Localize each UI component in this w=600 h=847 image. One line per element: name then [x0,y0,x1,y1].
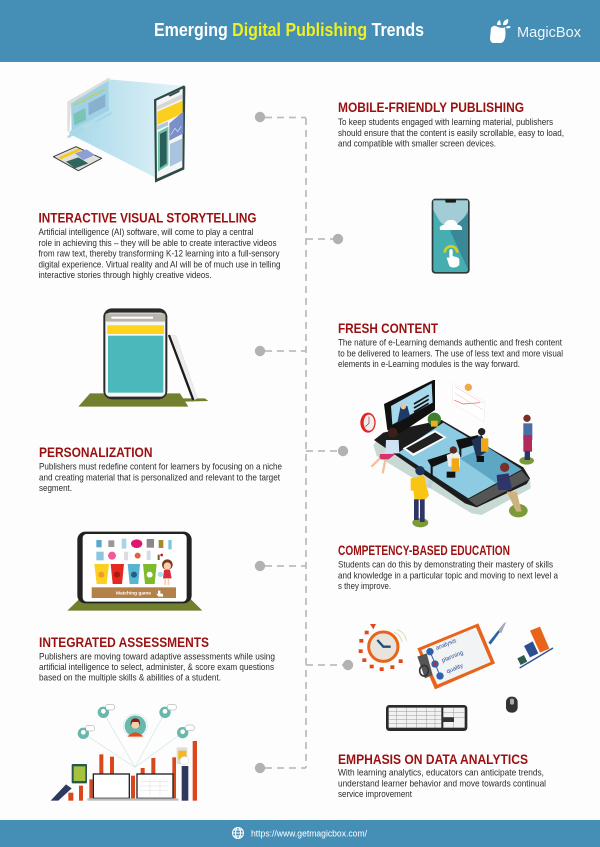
logo: MagicBox: MagicBox [517,24,581,41]
text: fresh content [338,320,563,369]
text: emphasis on data analytics: service improvement [338,788,412,799]
text: emphasis on data analytics: understand learner behavior and move towards continual [338,778,546,788]
text: personalization: Publishers must redefine content for learners by focusing on a niche [39,460,282,472]
illustration: matching game tablet [67,532,202,611]
illustration: tablet with stylus [78,308,208,407]
text: mobile-friendly publishing: should ensure that the content is easily scrollable, easy to load, [338,127,564,138]
timeline connector [255,112,353,773]
text: competency-based education [338,542,559,591]
text: fresh content: The nature of e-Learning demands authentic and fresh content [338,336,562,348]
text: integrated assessments: artificial intelligence to select, administer, & score exam questions [39,661,274,672]
text: fresh content: FRESH CONTENT [338,320,438,336]
illustration: monitor projecting to phone [53,77,185,183]
text: personalization: and creating material that is personalized and relevant to the target [39,472,280,482]
illustration: phone with cloud and touch [432,199,470,274]
text: integrated assessments: based on the multiple skills & abilities of a student. [39,672,221,682]
text: competency-based education: and knowledge in a particular topic and moving to next level a [338,570,559,580]
footer url: https://www.getmagicbox.com/ [251,828,367,838]
text: interactive visual storytelling [38,210,280,280]
illustration: data analytics desk: quality [446,663,464,675]
text: personalization: segment. [39,482,72,493]
text: emphasis on data analytics [338,751,546,799]
text: integrated assessments: Publishers are moving toward adaptive assessments while using [39,650,275,662]
text: emphasis on data analytics: With learning analytics, educators can anticipate trends, [338,766,544,778]
text: integrated assessments [39,634,275,682]
text: interactive visual storytelling: role in achieving this – they will be able to create interactive videos [38,237,277,248]
illustration: data analytics desk: analysis [435,638,457,652]
text: competency-based education: Students can do this by demonstrating their mastery of skills [338,558,553,570]
text: personalization: PERSONALIZATION [39,444,152,460]
footer band [0,820,600,847]
text: fresh content: to be delivered to learners. The use of less text and more visual [338,348,563,358]
text: interactive visual storytelling: INTERACTIVE VISUAL STORYTELLING [38,210,257,226]
text: mobile-friendly publishing: MOBILE-FRIENDLY PUBLISHING [338,99,524,115]
text: interactive visual storytelling: from raw text, thereby transforming K-12 learning into a full-sensory [38,248,280,258]
text: competency-based education: s they improve. [338,580,391,591]
text: mobile-friendly publishing: To keep students engaged with learning material, publishers [338,116,553,127]
text: mobile-friendly publishing: and compatible with smaller screen devices. [338,138,496,148]
logo: MagicBox [490,19,581,43]
illustration: data analytics desk: planning [441,650,464,664]
text: interactive visual storytelling: digital experience. Virtual reality and AI will be of much use in telling [38,258,280,270]
illustration: analytics network with bars [51,704,197,801]
text: personalization [39,444,282,493]
header band [0,0,600,62]
text: mobile-friendly publishing [338,99,564,148]
title: Emerging Digital Publishing Trends [154,20,424,40]
text: fresh content: elements in e-Learning modules is the way forward. [338,358,520,369]
illustration: matching game tablet: Matching game [116,591,151,597]
text: interactive visual storytelling: interactive stories through highly creative videos. [38,269,212,280]
illustration: data analytics desk [359,622,553,731]
text: interactive visual storytelling: Artificial intelligence (AI) software, will come to play a central [38,226,254,237]
illustration: people on giant phone [360,380,534,527]
text: integrated assessments: INTEGRATED ASSESSMENTS [39,634,209,650]
icon: globe [232,828,244,838]
text: emphasis on data analytics: EMPHASIS ON DATA ANALYTICS [338,751,528,767]
text: competency-based education: COMPETENCY-BASED EDUCATION [338,542,510,558]
